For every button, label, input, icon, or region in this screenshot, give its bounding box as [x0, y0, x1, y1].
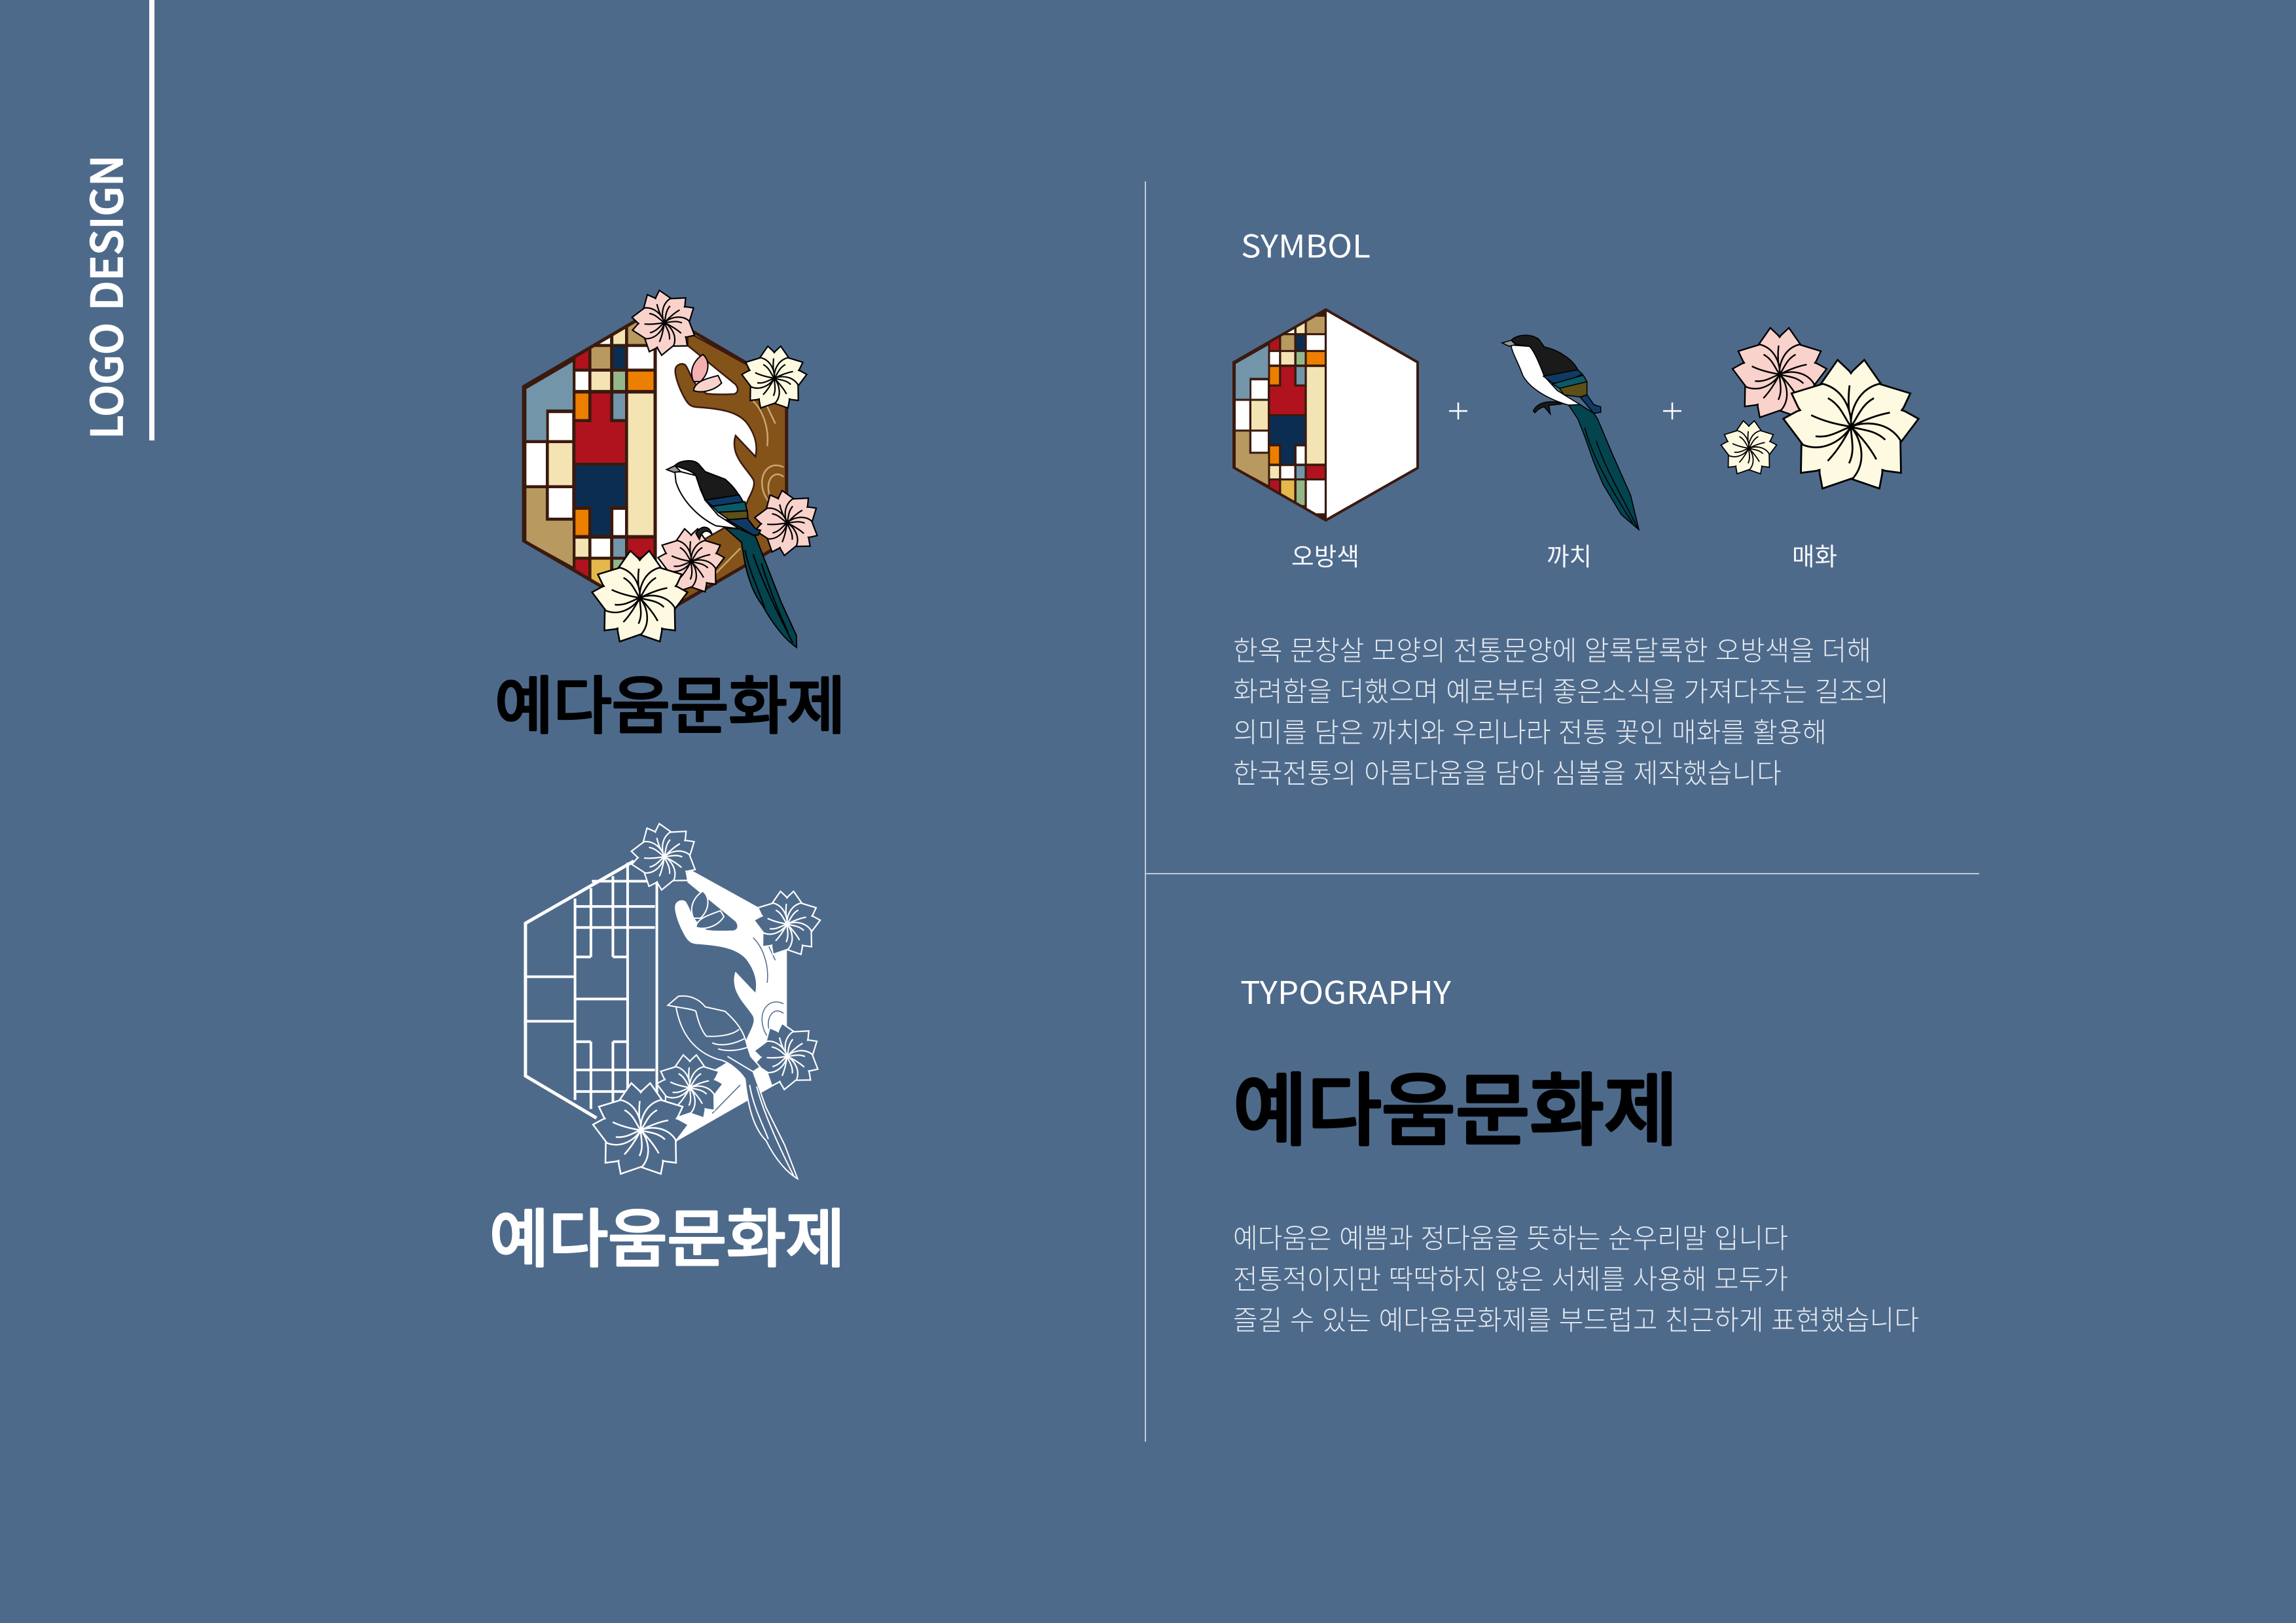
vertical divider: [1145, 181, 1146, 1442]
bud and magpie: [667, 355, 797, 647]
label: plum blossom: 매화: [1792, 537, 1837, 573]
panel: symbol components: [1234, 310, 1924, 529]
flower outline: lower: [654, 1055, 726, 1124]
colour emblem hexagon and tree: [524, 310, 787, 618]
wordmark: white logo: 예다움문화제: [490, 1188, 845, 1279]
symbol: large cream plum blossom: [1778, 360, 1924, 499]
flower outline: large: [589, 1083, 692, 1182]
symbol: obangsaek hexagon: [1234, 310, 1418, 520]
text block: symbol description: 한국전통의 아름다움을 담아 심볼을 제작했습니다: [1233, 758, 1782, 789]
text block: symbol description: 한옥 문창살 모양의 전통문양에 알록달록한 오방색을 더해: [1233, 635, 1871, 666]
symbol: small cream plum blossom: [1719, 421, 1779, 478]
panel: white line logo: [526, 813, 833, 1182]
symbol: magpie: [1502, 335, 1639, 529]
text block: typography description: 즐길 수 있는 예다움문화제를 부드럽고 친근하게 표현했습니다: [1233, 1305, 1919, 1336]
text block: typography description: 전통적이지만 딱딱하지 않은 서체를 사용해 모두가: [1233, 1264, 1788, 1294]
symbol: pink plum blossom: [1729, 328, 1831, 425]
flower outline: right upper: [751, 891, 823, 960]
label: magpie: 까치: [1547, 537, 1592, 573]
section title: LOGO DESIGN: LOGO DESIGN: [73, 155, 135, 439]
text block: typography description: [1233, 1223, 1919, 1336]
label: obangsaek: 오방색: [1291, 537, 1359, 573]
text block: symbol description: [1233, 635, 1889, 789]
panel: colour logo: [524, 281, 832, 649]
text block: typography description: 예다움은 예쁨과 정다움을 뜻하는 순우리말 입니다: [1233, 1223, 1788, 1254]
bud and magpie outline: [668, 891, 798, 1179]
plus sign one: [1449, 402, 1467, 419]
wordmark: typography sample: 예다움문화제: [1233, 1047, 1678, 1161]
heading: SYMBOL: SYMBOL: [1241, 221, 1371, 267]
wordmark: colour logo: 예다움문화제: [495, 656, 846, 746]
heading: TYPOGRAPHY: TYPOGRAPHY: [1240, 967, 1452, 1013]
flower: right pink: [743, 481, 832, 568]
flower: top pink: [620, 281, 709, 368]
plus sign two: [1663, 402, 1681, 419]
flower outline: right lower: [742, 1013, 833, 1102]
flower outline: top: [619, 813, 710, 902]
white emblem hexagon, lattice and tree: [526, 861, 787, 1147]
horizontal divider: [1145, 873, 1979, 874]
text block: symbol description: 화려함을 더했으며 예로부터 좋은소식을 가져다주는 길조의: [1233, 677, 1889, 707]
flower: right cream: [739, 346, 810, 413]
flower: lower pink: [655, 529, 727, 597]
text block: symbol description: 의미를 담은 까치와 우리나라 전통 꽃인 매화를 활용해: [1233, 717, 1827, 748]
section rule: [149, 0, 154, 440]
flower: large cream: [588, 551, 692, 649]
